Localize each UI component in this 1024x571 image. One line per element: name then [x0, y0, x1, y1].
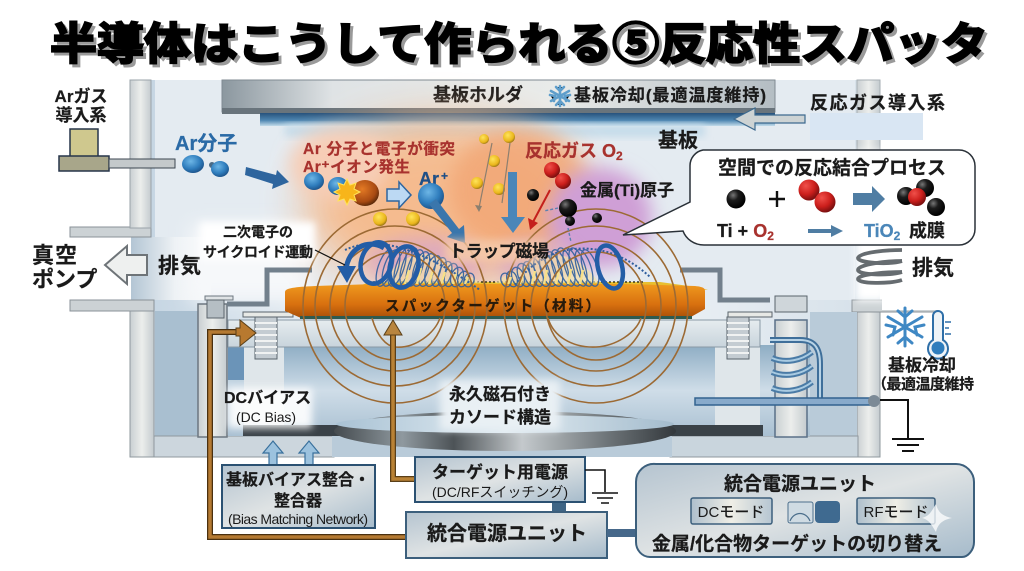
icon: cooling snowflake and thermometer — [886, 308, 951, 359]
permanent magnet label: カソード構造 — [449, 408, 551, 427]
panel: integrated power detail — [636, 464, 974, 557]
reactive gas O2 — [525, 141, 623, 230]
DC bias label — [224, 388, 312, 428]
icon: exhaust bellows right — [858, 250, 902, 283]
bias arrows — [263, 441, 319, 465]
box: target power: (DC/RFスイッチング) — [432, 484, 568, 500]
Ar gas inlet: 導入系 — [56, 106, 106, 125]
cycloid label: サイクロイド運動 — [203, 244, 313, 260]
left vacuum port opening — [66, 237, 154, 300]
reactive gas O2: 反応ガス O — [525, 141, 616, 161]
exhaust label right: 排気 — [912, 257, 954, 280]
arrow: ion to target — [429, 199, 465, 243]
reactive gas O2: 2 — [616, 149, 623, 163]
DC bias label: (DC Bias) — [236, 409, 296, 425]
connector — [552, 500, 566, 514]
arrow: ionisation — [387, 182, 411, 208]
reaction equation: TiO — [864, 221, 894, 241]
arrow: Ar flow — [245, 167, 289, 189]
box: bias matching network — [222, 465, 375, 528]
cooling label right: 基板冷却 — [888, 356, 956, 375]
ground symbol center — [585, 470, 618, 503]
electron trap coils — [345, 244, 650, 290]
Ar gas inlet — [55, 87, 175, 171]
box: bias matching network: (Bias Matching Network) — [228, 511, 368, 527]
cycloid label — [200, 222, 345, 265]
box: bias matching network: 基板バイアス整合・ — [226, 471, 370, 489]
reaction equation: Ti + O — [717, 221, 767, 241]
copper DC line — [210, 320, 406, 537]
box: bias matching network: 整合器 — [274, 492, 322, 510]
permanent magnet label — [440, 380, 560, 430]
holder label: 基板ホルダ — [433, 84, 523, 105]
reactive gas inlet pipe — [734, 108, 923, 140]
DC bias label: DCバイアス — [224, 390, 311, 407]
cooling coil and pipe — [695, 340, 880, 407]
box: integrated power — [406, 512, 607, 558]
arrow: gas down — [501, 172, 525, 233]
reaction equation — [717, 220, 945, 243]
collision illustration — [304, 172, 411, 208]
callout: reaction process: 空間での反応結合プロセス — [718, 157, 946, 179]
vacuum pump label — [32, 243, 97, 292]
Ar+ ion — [418, 169, 465, 243]
title: 半導体はこうして作られる⑤反応性スパッタ — [50, 20, 988, 69]
panel: integrated power detail: 金属/化合物ターゲットの切り替え — [652, 533, 942, 555]
Ar gas label: Arガス — [55, 87, 107, 106]
Ar+ ion: Ar — [419, 169, 439, 189]
box: target power — [415, 457, 585, 502]
target label: スパックターゲット（材料） — [385, 297, 600, 315]
clamps and posts — [198, 270, 807, 437]
ground symbol right — [880, 400, 924, 451]
arrow: O2 down — [533, 190, 550, 222]
sparkle — [922, 504, 952, 532]
plasma glow — [290, 120, 652, 290]
RF mode: RFモード — [864, 504, 928, 521]
DC mode: DCモード — [698, 504, 764, 521]
icon: snowflake — [550, 86, 570, 106]
DC mode — [691, 498, 772, 524]
vacuum pump label: ポンプ — [32, 267, 97, 292]
reaction equation: 成膜 — [909, 220, 945, 241]
metal Ti atoms — [527, 180, 674, 242]
cooling label: 基板冷却(最適温度維持) — [574, 86, 766, 105]
copper target line — [384, 320, 415, 479]
exhaust label left: 排気 — [158, 255, 202, 278]
mode switch icon — [788, 501, 840, 523]
magnetic field lines — [303, 209, 688, 403]
trap field label: トラップ磁場 — [449, 242, 549, 261]
box: integrated power: 統合電源ユニット — [427, 522, 587, 545]
panel: substrate holder — [222, 80, 775, 137]
Ar molecules: Ar分子 — [175, 132, 237, 155]
cycloid label: 二次電子の — [223, 224, 293, 240]
permanent magnet label: 永久磁石付き — [449, 385, 551, 404]
arrow: exhaust to pump — [105, 246, 147, 284]
panel: integrated power detail: 統合電源ユニット — [724, 473, 876, 495]
cooling label right — [872, 356, 974, 393]
reactive gas inlet label: 反応ガス導入系 — [810, 93, 945, 113]
sputter target — [285, 282, 708, 319]
collision text: Ar⁺イオン発生 — [303, 158, 410, 176]
panel: lower cathode structure — [228, 320, 810, 457]
deposited film strip — [350, 282, 708, 290]
collision text: Ar 分子と電子が衝突 — [303, 139, 455, 158]
cooling label right: （最適温度維持 — [872, 375, 974, 393]
reactive gas particles — [373, 131, 525, 233]
Ar+ ion: + — [441, 169, 448, 183]
reaction equation: 2 — [767, 229, 774, 243]
connector — [607, 529, 637, 537]
reaction molecules — [726, 179, 945, 216]
cathode disc — [334, 411, 676, 451]
RF mode — [857, 498, 935, 524]
right wall — [857, 80, 880, 150]
title: 半導体はこうして作られる⑤反応性スパッタ — [53, 23, 991, 72]
vacuum pump label: 真空 — [32, 243, 78, 268]
substrate label: 基板 — [658, 129, 698, 152]
metal Ti atoms: 金属(Ti)原子 — [580, 180, 674, 200]
reaction equation: 2 — [894, 229, 901, 243]
Ar molecules — [175, 132, 289, 189]
collision text — [303, 139, 455, 176]
large cycloid loops — [337, 239, 627, 291]
callout: reaction process — [623, 150, 975, 245]
box: target power: ターゲット用電源 — [432, 463, 568, 482]
panel: vacuum chamber — [66, 80, 1024, 457]
